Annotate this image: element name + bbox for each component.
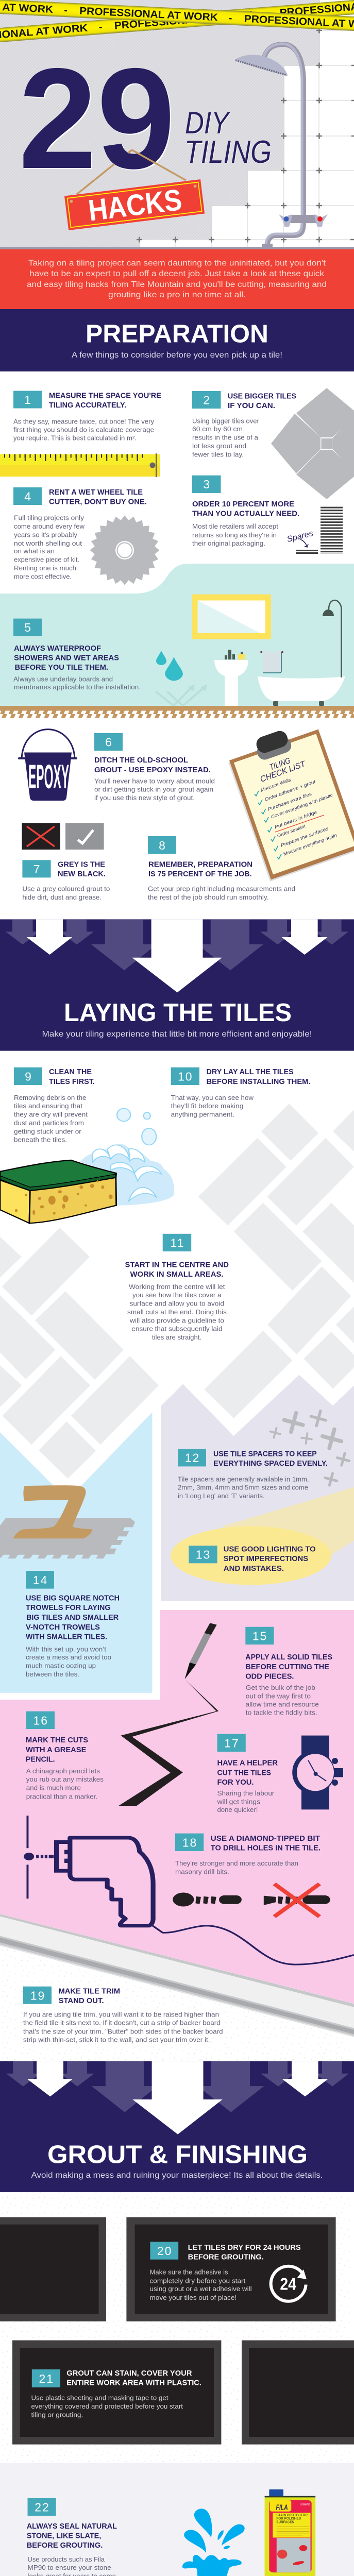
section header: preparation	[0, 309, 354, 371]
tip 6: EPOXY	[28, 757, 69, 795]
intro text: have to be an expert to pull off a decent job. Just take a look at these quick	[29, 269, 325, 278]
tip 19: STAND OUT.	[59, 1996, 104, 2005]
tip 16: 16	[33, 1714, 48, 1727]
panel: bathroom tip 5: Always use underlay boards and	[13, 675, 113, 683]
tape upper	[0, 0, 354, 32]
tip 19: strip with thin-set, stick it to the wall, and set your trim over it.	[23, 2036, 210, 2043]
light beam	[222, 1487, 354, 1561]
panel: bathroom tip 5: SHOWERS AND WET AREAS	[14, 653, 119, 662]
icon: 24 hour clock	[271, 2266, 307, 2301]
tip 11: tiles are straight.	[152, 1333, 201, 1341]
dark tile: tip 20: completely dry before you start	[149, 2277, 246, 2284]
tip 1: you require. This is best calculated in m².	[13, 434, 137, 442]
dark tile: tip 21: everything covered and protected before you start	[31, 2402, 183, 2410]
tip 8	[148, 836, 295, 901]
tip 2: lot less grout and	[192, 442, 246, 450]
tip 16: WITH A GREASE	[26, 1745, 86, 1754]
tape lower	[0, 0, 354, 43]
tape upper: -	[228, 12, 232, 24]
tip 7	[22, 860, 110, 901]
tape upper: -	[64, 5, 68, 16]
checklist items: Put beers in fridge	[274, 809, 317, 829]
panel: bathroom tip 5: ALWAYS WATERPROOF	[14, 644, 101, 653]
dark tile: tip 21: ENTIRE WORK AREA WITH PLASTIC.	[66, 2379, 201, 2387]
section header: grout and finishing	[0, 2061, 354, 2192]
dark tile: tip 20: BEFORE GROUTING.	[188, 2252, 264, 2261]
tip 9: CLEAN THE	[49, 1067, 92, 1076]
tip 10: BEFORE INSTALLING THEM.	[206, 1077, 310, 1086]
tip 12: USE TILE SPACERS TO KEEP	[213, 1449, 317, 1458]
section header: laying the tiles: LAYING THE TILES	[64, 999, 292, 1027]
tip 10	[171, 1067, 310, 1118]
hacks sign: HACKS	[87, 183, 183, 228]
tip 13: USE GOOD LIGHTING TO	[224, 1545, 316, 1554]
checklist items: Measure everything again	[282, 833, 338, 857]
icon: epoxy bucket	[19, 730, 76, 801]
can label text: STAIN PROTECTOR	[276, 2513, 308, 2517]
tip 12	[178, 1449, 328, 1500]
section header: preparation: PREPARATION	[86, 320, 268, 348]
tip 4: Renting one is much	[14, 564, 76, 572]
tip 17: will get things	[216, 1798, 261, 1805]
tip 2: 60 cm by 60 cm	[192, 425, 243, 433]
tip 11: START IN THE CENTRE AND	[125, 1260, 229, 1269]
tip 9: they are dry will prevent	[14, 1110, 88, 1118]
tip 1	[13, 391, 161, 442]
tip 18: USE A DIAMOND-TIPPED BIT	[211, 1834, 320, 1843]
tip 7: Use a grey coloured grout to	[22, 885, 110, 893]
tip 19: the field tile it sits next to. If it doesn't, cut a strip of backer board	[23, 2019, 221, 2027]
icon: water drops	[156, 651, 183, 681]
can label text: SURFACES	[276, 2519, 294, 2524]
intro text: grouting like a pro in no time at all.	[108, 291, 246, 299]
tip 8: Get your prep right including measurements and	[148, 885, 295, 893]
tip 16: and is much more	[26, 1784, 81, 1792]
panel: lavender tips 12 and 13	[161, 1375, 354, 1601]
icon: grease pencil and zigzag line	[119, 1623, 218, 1806]
panel: blue tip 14: create a mess and avoid too	[26, 1653, 111, 1661]
icon: clipboard checklist	[228, 729, 354, 882]
tip 13: SPOT IMPERFECTIONS	[224, 1554, 308, 1563]
tip 17: 17	[224, 1736, 240, 1750]
floor line	[0, 247, 354, 249]
tip 15: ODD PIECES.	[245, 1672, 294, 1681]
intro text	[27, 259, 327, 299]
icon: black and grey grout swatches	[22, 823, 104, 850]
section header: grout and finishing: Avoid making a mess and ruining your masterpiece! Its all about the details.	[31, 2171, 323, 2180]
can label text: FOR POLISHED	[276, 2516, 301, 2521]
tip 4: CUTTER, DON'T BUY ONE.	[49, 498, 147, 506]
tip 16	[26, 1711, 104, 1800]
tip 15: to tackle the fiddly bits.	[246, 1709, 317, 1717]
tip 10: they'll fit before making	[171, 1102, 243, 1110]
tip 4: years so it's probably	[14, 531, 77, 538]
tip 12: 12	[185, 1451, 200, 1465]
tip 6: DITCH THE OLD-SCHOOL	[94, 756, 188, 765]
tip 4	[13, 487, 160, 585]
tip 13: 13	[196, 1548, 211, 1562]
dark tile: tip 21: GROUT CAN STAIN, COVER YOUR	[66, 2369, 192, 2378]
tip 2: Using bigger tiles over	[192, 417, 260, 425]
dark tile: tip 20: using grout or a wet adhesive will	[149, 2285, 252, 2293]
tip 1: As they say, measure twice, cut once! The very	[13, 417, 154, 425]
checklist title: CHECK LIST	[259, 759, 307, 784]
tape upper: PROFESSIONAL AT WORK	[79, 5, 218, 23]
tip 19: 19	[30, 1989, 45, 2002]
panel: bathroom tip 5: BEFORE YOU TILE THEM.	[14, 663, 108, 672]
tip 13: AND MISTAKES.	[224, 1564, 284, 1573]
tip 2: 2	[203, 394, 210, 407]
icon: notched trowel	[0, 1485, 135, 1558]
tip 11: ensure that subsequently laid	[132, 1325, 223, 1333]
tip 9: tiles and ensuring that	[14, 1102, 82, 1110]
tip 22: STONE, LIKE SLATE,	[27, 2532, 101, 2540]
panel: bathroom tip 5: membranes applicable to the installation.	[14, 683, 141, 691]
tip 7: hide dirt, dust and grease.	[22, 893, 102, 901]
icon: 24 hour clock: 24	[280, 2274, 297, 2294]
checklist items: Order adhesive + grout	[264, 779, 316, 802]
icon: arrows	[156, 685, 207, 706]
tip 9: beneath the tiles.	[14, 1136, 67, 1144]
icon: power drill	[24, 1816, 354, 1964]
icon: sponge and foam	[0, 1108, 174, 1223]
tip 16: you rub out any mistakes	[26, 1775, 104, 1783]
icon: saw blade	[90, 515, 160, 585]
checklist items: Purchase extra files	[267, 791, 313, 812]
tape lower: -	[263, 8, 267, 20]
tip 22: BEFORE GROUTING.	[27, 2541, 103, 2550]
tip 3: their original packaging.	[192, 539, 265, 547]
dark tile: tip 20: 20	[157, 2244, 172, 2258]
tip 6: GROUT - USE EPOXY INSTEAD.	[94, 766, 211, 774]
tip 13	[171, 1526, 331, 1585]
tip 15	[245, 1627, 332, 1717]
intro panel	[0, 249, 354, 309]
tape lower: -	[98, 21, 103, 33]
panel: blue tip 14: BIG TILES AND SMALLER	[26, 1613, 119, 1622]
can label text	[276, 2503, 310, 2524]
tip 11: small cuts at the end. Doing this	[127, 1308, 227, 1316]
icon: spare tile stacks: Spares	[286, 529, 314, 544]
tip 11: will also provide a guideline to	[129, 1316, 224, 1324]
dark tile: tip 20: Make sure the adhesive is	[149, 2268, 228, 2276]
tip 2: fewer tiles to lay.	[192, 451, 244, 459]
icon: tile spacers	[269, 1409, 351, 1487]
tip 15: BEFORE CUTTING THE	[245, 1663, 329, 1671]
panel: blue tip 14: USE BIG SQUARE NOTCH	[26, 1594, 120, 1602]
tip 3: THAN YOU ACTUALLY NEED.	[192, 510, 299, 518]
tip 9: TILES FIRST.	[49, 1077, 95, 1086]
speckled wall background	[0, 1914, 354, 2463]
tip 8: REMEMBER, PREPARATION	[148, 860, 252, 869]
tip 9: 9	[25, 1070, 31, 1083]
tip 12: in 'Long Leg' and 'T' variants.	[178, 1492, 265, 1500]
tip 1: 1	[24, 393, 31, 406]
section header: preparation: A few things to consider before you even pick up a tile!	[72, 351, 282, 360]
icon: mirror	[192, 595, 271, 639]
tip 19: MAKE TILE TRIM	[59, 1987, 120, 1996]
tip 2	[192, 388, 354, 499]
tip 12: 2mm, 3mm, 4mm and 5mm sizes and come	[178, 1484, 308, 1492]
tip 17	[216, 1734, 343, 1814]
dark tile left	[0, 2217, 106, 2321]
tip 22: ALWAYS SEAL NATURAL	[27, 2522, 117, 2531]
tip 15: allow time and resource	[246, 1700, 319, 1708]
icon: spare tile stacks	[286, 507, 332, 554]
tip 18	[173, 1834, 330, 1917]
white tiled wall	[137, 0, 354, 247]
tip 1: TILING ACCURATELY.	[49, 401, 126, 410]
section header: laying the tiles: Make your tiling experience that little bit more efficient and enjoyable!	[42, 1030, 312, 1039]
tip 11: WORK IN SMALL AREAS.	[130, 1270, 224, 1279]
tip 8: 8	[159, 839, 165, 852]
dark tile: tip 20: LET TILES DRY FOR 24 HOURS	[188, 2243, 301, 2252]
tip 4: come around every few	[14, 522, 85, 530]
tip 15: Get the bulk of the job	[246, 1684, 315, 1691]
tan stripe border	[0, 706, 354, 718]
tip 19: that's the size of your trim. "Butter" both sides of the backer board	[23, 2027, 223, 2035]
tip 4: more cost effective.	[14, 573, 72, 581]
tip 2: IF YOU CAN.	[228, 401, 275, 410]
tip 8: IS 75 PERCENT OF THE JOB.	[148, 870, 252, 878]
tip 12: Tile spacers are generally available in 1mm,	[178, 1476, 309, 1483]
tip 16: MARK THE CUTS	[26, 1736, 88, 1744]
icon: shelf with splash and sealer can	[143, 2489, 354, 2576]
tip 18: TO DRILL HOLES IN THE TILE.	[211, 1844, 321, 1853]
tip 1: MEASURE THE SPACE YOU'RE	[49, 392, 161, 400]
tip 17: HAVE A HELPER	[217, 1759, 278, 1768]
tip 9	[14, 1067, 95, 1144]
tip 7: 7	[33, 862, 40, 876]
title DIY TILING	[184, 106, 272, 170]
tip 4: Full tiling projects only	[14, 514, 85, 522]
panel: blue tip 14: between the tiles.	[26, 1670, 79, 1678]
tape lower: PROFESSIONAL AT WORK	[114, 9, 253, 31]
tip 16: practical than a marker.	[26, 1792, 97, 1800]
tip 22	[27, 2498, 118, 2576]
tip 10: anything permanent.	[171, 1110, 234, 1118]
title number 29: 29	[19, 38, 175, 198]
tip 2: results in the use of a	[192, 434, 259, 441]
tip 2: USE BIGGER TILES	[228, 392, 296, 400]
tip 11: Working from the centre will let	[129, 1283, 225, 1291]
tip 10: That way, you can see how	[171, 1094, 254, 1101]
checklist items: Cover everything with plastic	[270, 792, 334, 820]
tip 11	[125, 1234, 229, 1341]
tip 22: Use products such as Fila	[28, 2555, 105, 2563]
tip 19	[23, 1987, 223, 2043]
panel: pink tips 15 to 18	[0, 1610, 354, 2576]
checklist title: TILING	[268, 756, 292, 772]
panel: blue tip 14: V-NOTCH TROWELS	[26, 1623, 100, 1632]
panel: blue tip 14: WITH SMALLER TILES.	[26, 1633, 107, 1641]
tip 19: If you are using tile trim, you will want it to be raised higher than	[23, 2010, 219, 2019]
tip 15: 15	[252, 1629, 267, 1642]
tip 4: on what is an	[14, 547, 55, 555]
panel: blue tip 14: TROWELS FOR LAYING	[26, 1603, 111, 1612]
icon: sink	[214, 650, 248, 706]
panel: blue tip 14: With this set up, you won’t	[26, 1645, 106, 1653]
tip 10: 10	[178, 1070, 193, 1083]
tip 3: Most tile retailers will accept	[192, 522, 278, 530]
icon: tape measure	[0, 453, 160, 477]
background tile pattern	[0, 1104, 354, 1479]
icon: down arrows	[6, 919, 348, 992]
can label text: FILA	[276, 2503, 288, 2512]
tip 6: if you use this new style of grout.	[94, 794, 195, 802]
checklist items: Measure Walls	[260, 777, 292, 793]
tip 18: 18	[182, 1836, 197, 1849]
tip 6: 6	[105, 736, 112, 749]
dark tile: tip 21	[12, 2340, 221, 2445]
checklist items: Order sealant	[276, 823, 307, 838]
dark tile: tip 21: Use plastic sheeting and masking tape to get	[31, 2394, 168, 2401]
tip 22: MP90 to ensure your stone	[28, 2564, 111, 2571]
dark tile: tip 21: 21	[39, 2372, 54, 2385]
tip 17: CUT THE TILES	[217, 1768, 271, 1777]
icon: large grey tiles	[271, 388, 354, 499]
tip 17: done quicker!	[217, 1806, 258, 1814]
tip 4: not worth shelling out	[14, 539, 82, 547]
tip 10: DRY LAY ALL THE TILES	[206, 1067, 294, 1076]
tip 15: APPLY ALL SOLID TILES	[245, 1653, 332, 1662]
panel: bathroom tip 5	[0, 564, 354, 706]
intro text: and easy tiling hacks from Tile Mountain and you'll be cutting, measuring and	[27, 280, 327, 289]
tip 9: dust and particles from	[14, 1119, 84, 1127]
dark tile right	[242, 2340, 354, 2445]
tip 4: 4	[24, 489, 31, 503]
title DIY TILING: TILING	[184, 134, 272, 170]
tip 9: Removing debris on the	[14, 1094, 86, 1101]
section header: laying the tiles	[0, 919, 354, 1051]
tip 6	[19, 730, 215, 802]
tip 16: PENCIL.	[26, 1755, 55, 1764]
icon: watch	[292, 1736, 343, 1809]
can label text: FILAMP90	[300, 2503, 310, 2506]
panel: blue tip 14: 14	[33, 1573, 48, 1587]
tip 7: NEW BLACK.	[58, 870, 106, 878]
tip 12: EVERYTHING SPACED EVENLY.	[213, 1459, 328, 1468]
sign string left	[77, 150, 132, 194]
icon: drill bits	[173, 1884, 330, 1917]
tip 9: getting stuck under or	[14, 1127, 81, 1135]
icon: down arrows	[6, 2061, 349, 2134]
tip 16: A chinagraph pencil lets	[26, 1767, 100, 1775]
tip 7: GREY IS THE	[58, 860, 105, 869]
dark tile: tip 21: tiling or grouting.	[31, 2411, 83, 2419]
tip 18: masonry drill bits.	[175, 1868, 229, 1876]
tile trim strip	[0, 1914, 354, 2037]
tip 1: first thing you should do is calculate coverage	[13, 426, 154, 433]
icon: bath	[258, 600, 345, 706]
panel: blue tip 14	[0, 1412, 152, 1693]
panel: grey tips 22 to 27	[0, 2463, 354, 2576]
tip 15: out of the way first to	[246, 1692, 311, 1700]
tip 11: surface and allow you to avoid	[130, 1299, 224, 1307]
tip 3: ORDER 10 PERCENT MORE	[192, 500, 294, 509]
tip 11: you see how the tiles cover a	[132, 1291, 222, 1299]
tip 11: 11	[171, 1236, 184, 1249]
icon: towel	[261, 651, 283, 673]
tip 4: expensive piece of kit.	[14, 555, 79, 563]
dark tile: tip 20: move your tiles out of place!	[149, 2294, 237, 2301]
tip 17: Sharing the labour	[217, 1789, 275, 1797]
checklist items	[255, 777, 338, 859]
tip 18: They're stronger and more accurate than	[175, 1859, 298, 1867]
tip 8: the rest of the job should run smoothly.	[148, 893, 269, 901]
panel: bathroom tip 5: 5	[24, 621, 31, 634]
dark tile: tip 20	[126, 2217, 336, 2321]
header panel	[0, 0, 354, 249]
checklist items: Prepare the surfaces	[280, 826, 329, 848]
tip 3: returns so long as they're in	[192, 531, 277, 539]
tip 4: RENT A WET WHEEL TILE	[49, 488, 143, 497]
intro text: Taking on a tiling project can seem daunting to the uninitiated, but you don't	[28, 259, 326, 268]
tip 17: FOR YOU.	[217, 1778, 254, 1787]
section header: grout and finishing: GROUT & FINISHING	[47, 2141, 308, 2168]
title DIY TILING: DIY	[185, 106, 230, 140]
tape upper: AT WORK	[2, 2, 54, 15]
tape lower: IONAL AT WORK	[0, 23, 88, 41]
panel: blue tip 14: much mastic oozing up	[26, 1662, 96, 1669]
tip 6: You'll never have to worry about mould	[94, 777, 215, 785]
tip 3: 3	[203, 478, 210, 491]
tip 22: 22	[35, 2501, 50, 2514]
tip 3	[192, 476, 332, 554]
icon: shower	[235, 44, 328, 247]
sign string right	[128, 150, 186, 180]
tip 6: or dirt getting stuck in your grout again	[94, 786, 213, 793]
